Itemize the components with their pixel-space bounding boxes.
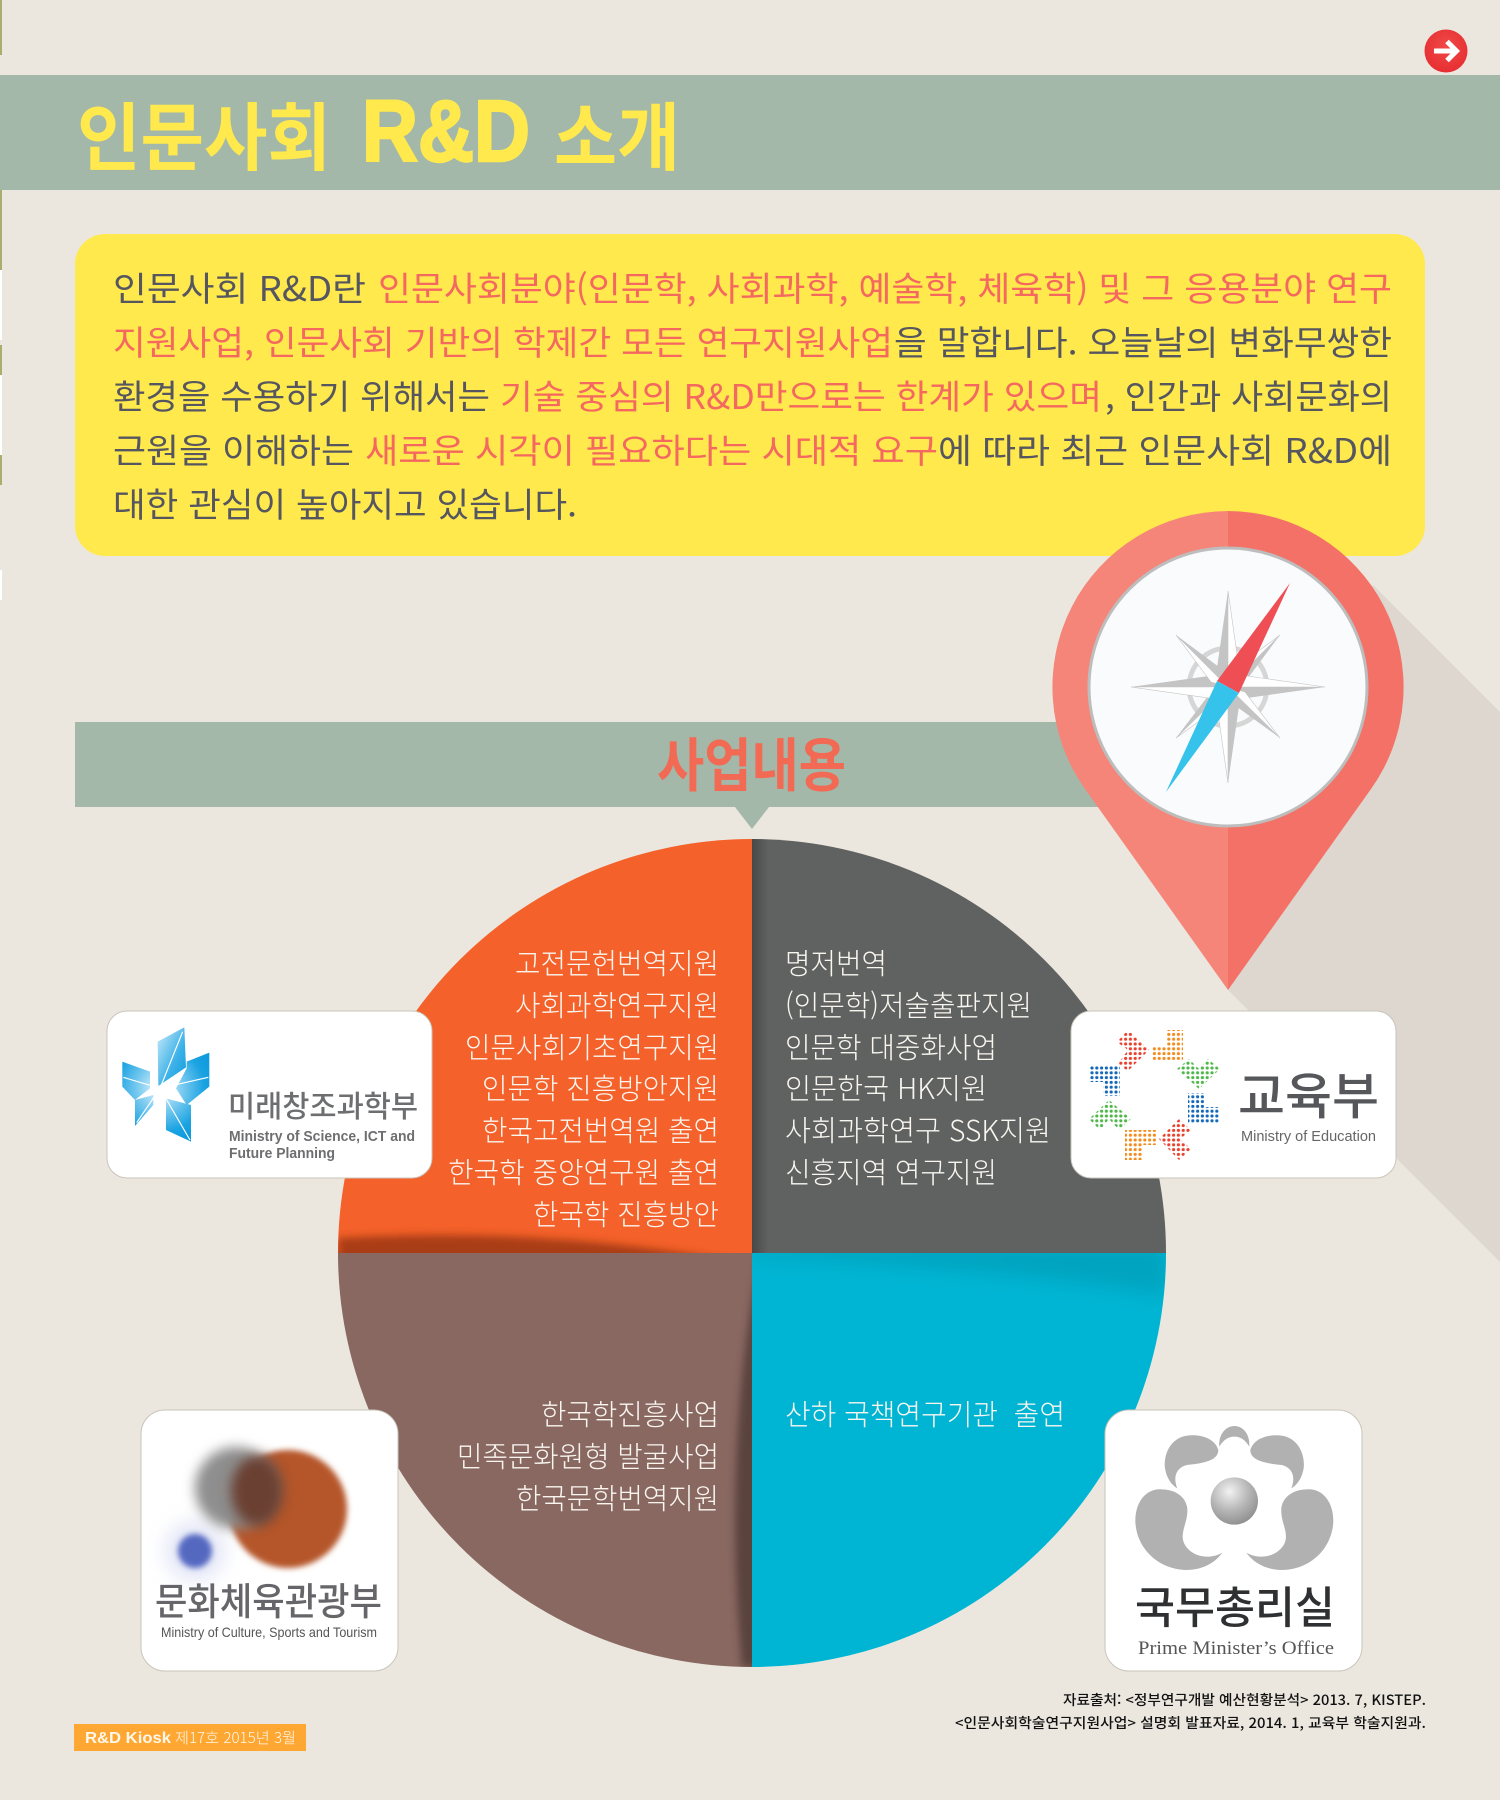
logo card: Ministry of Science, ICT and Future Planning: 미래창조과학부 [228, 1082, 418, 1126]
panel: introduction text: 기술 중심의 R&D만으로는 한계가 있으며 [500, 370, 1102, 419]
text block: bottom-left quadrant list: 민족문화원형 발굴사업 [457, 1434, 719, 1476]
logo card: Ministry of Education: 교육부 [1238, 1057, 1379, 1129]
source note: 자료출처: <정부연구개발 예산현황분석> 2013. 7, KISTEP. [1063, 1690, 1426, 1710]
logo card: Ministry of Science, ICT and Future Planning: Future Planning [229, 1145, 335, 1162]
logo card: Prime Minister's Office: Prime Minister’s Office [1138, 1638, 1334, 1659]
icon: compass map pin [1052, 511, 1404, 990]
text block: top-right quadrant list: 인문한국 HK지원 [785, 1066, 987, 1108]
text block: top-left quadrant list: 한국학 중앙연구원 출연 [448, 1150, 719, 1192]
text block: top-left quadrant list: 고전문헌번역지원 [515, 941, 719, 983]
panel: introduction text: 에 따라 최근 인문사회 R&D에 [938, 424, 1392, 473]
publication tag [74, 1724, 306, 1751]
panel: introduction text: , 인간과 사회문화의 [1105, 370, 1392, 419]
text block: top-right quadrant list: 신흥지역 연구지원 [785, 1150, 997, 1192]
source note: <인문사회학술연구지원사업> 설명회 발표자료, 2014. 1, 교육부 학술지원과. [955, 1713, 1426, 1733]
quadrant: bottom-left brown [338, 1253, 752, 1667]
text block: top-right quadrant list: 인문학 대중화사업 [785, 1025, 997, 1067]
panel: introduction text: 인문사회분야(인문학, 사회과학, 예술학, 체육학) 및 그 응용분야 연구 [378, 262, 1392, 311]
logo card: Ministry of Science, ICT and Future Planning: Ministry of Science, ICT and [229, 1128, 415, 1145]
title: 소개 [554, 79, 680, 186]
pin shadow [1228, 585, 1500, 1262]
quadrant: bottom-right cyan [752, 1253, 1166, 1667]
panel: introduction text: 대한 관심이 높아지고 있습니다. [113, 478, 577, 527]
panel: introduction text: 새로운 시각이 필요하다는 시대적 요구 [365, 424, 938, 473]
title: 인문사회 [77, 79, 331, 186]
chart: four-quadrant programme circle [338, 839, 1166, 1667]
logo card: Ministry of Culture, Sports and Tourism: Ministry of Culture, Sports and Tourism [161, 1624, 377, 1640]
section heading bar [75, 719, 1150, 829]
panel: introduction text: 근원을 이해하는 [113, 424, 354, 473]
text block: top-left quadrant list: 한국학 진흥방안 [533, 1192, 719, 1234]
text block: top-left quadrant list: 사회과학연구지원 [515, 983, 719, 1025]
section heading bar: 사업내용 [657, 719, 846, 803]
title: R&D [362, 83, 530, 180]
header band [0, 75, 1500, 190]
quadrant: top-left orange [338, 839, 752, 1253]
logo card: Ministry of Science, ICT and Future Planning [107, 1011, 432, 1178]
logo card: Ministry of Education: Ministry of Education [1241, 1129, 1376, 1145]
left edge strip [0, 0, 2, 600]
text block: top-right quadrant list: 사회과학연구 SSK지원 [785, 1108, 1051, 1150]
publication tag: R&D Kiosk [85, 1730, 171, 1747]
panel: introduction text [75, 234, 1425, 556]
text block: top-left quadrant list [448, 941, 719, 1234]
text block: top-left quadrant list: 인문학 진흥방안지원 [482, 1066, 719, 1108]
source note [955, 1690, 1426, 1733]
text block: top-left quadrant list: 한국고전번역원 출연 [482, 1108, 719, 1150]
quadrant: top-right grey [752, 839, 1166, 1253]
panel: introduction text: 지원사업, 인문사회 기반의 학제간 모든 연구지원사업 [113, 316, 893, 365]
text block: top-right quadrant list: (인문학)저술출판지원 [785, 983, 1032, 1025]
publication tag: 제17호 2015년 3월 [175, 1727, 296, 1748]
panel: introduction text: 인문사회 R&D란 [113, 262, 366, 311]
text block: bottom-right quadrant: 산하 국책연구기관 출연 [785, 1392, 1065, 1434]
text block: top-right quadrant list: 명저번역 [785, 941, 887, 983]
text block: top-left quadrant list: 인문사회기초연구지원 [465, 1025, 719, 1067]
logo card: Ministry of Culture, Sports and Tourism [141, 1410, 398, 1671]
logo card: Prime Minister's Office [1105, 1410, 1362, 1671]
logo card: Ministry of Education [1071, 1011, 1396, 1178]
text block: bottom-left quadrant list [457, 1392, 719, 1518]
logo card: Prime Minister's Office: 국무총리실 [1135, 1572, 1335, 1636]
text block: bottom-left quadrant list: 한국학진흥사업 [541, 1392, 719, 1434]
panel: introduction text: 환경을 수용하기 위해서는 [113, 370, 490, 419]
text block: bottom-left quadrant list: 한국문학번역지원 [516, 1476, 719, 1518]
panel: introduction text: 을 말합니다. 오늘날의 변화무쌍한 [894, 316, 1392, 365]
logo card: Ministry of Culture, Sports and Tourism: 문화체육관광부 [155, 1571, 382, 1626]
text block: top-right quadrant list [785, 941, 1051, 1192]
next-page arrow button [1424, 30, 1468, 72]
title [77, 79, 680, 186]
